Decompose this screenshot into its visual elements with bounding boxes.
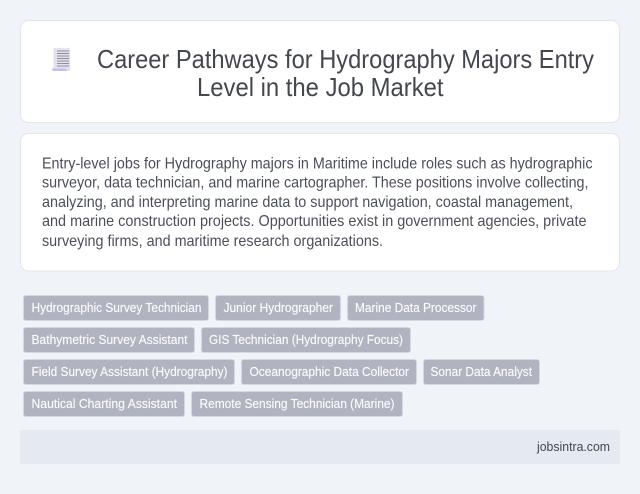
- footer source text: jobsintra.com: [536, 439, 610, 454]
- tag: Nautical Charting Assistant: [24, 392, 184, 416]
- tag: GIS Technician (Hydrography Focus): GIS Technician (Hydrography Focus): [209, 332, 403, 347]
- tag: GIS Technician (Hydrography Focus): [202, 328, 410, 352]
- panel: description card: [20, 134, 620, 271]
- title: [97, 44, 594, 102]
- tag: Junior Hydrographer: [216, 296, 340, 320]
- text block: description: surveyor, data technician, and marine cartographer. These positions involve collecting,: [42, 174, 588, 192]
- text block: description: and marine construction projects. Opportunities exist in government agencies, private: [42, 213, 586, 230]
- tag: Hydrographic Survey Technician: Hydrographic Survey Technician: [32, 300, 202, 315]
- icon: paper scroll: [52, 48, 70, 71]
- footer bar: [20, 430, 620, 464]
- tag: Oceanographic Data Collector: Oceanographic Data Collector: [250, 364, 410, 379]
- tag list: [24, 296, 540, 416]
- tag: Sonar Data Analyst: Sonar Data Analyst: [430, 364, 532, 379]
- tag: Bathymetric Survey Assistant: [24, 328, 194, 352]
- title: Level in the Job Market: [197, 72, 444, 102]
- tag: Marine Data Processor: Marine Data Processor: [355, 300, 477, 315]
- text block: description: Entry-level jobs for Hydrography majors in Maritime include roles such as hydrographic: [42, 156, 593, 172]
- tag: Sonar Data Analyst: [424, 360, 540, 384]
- tag: Field Survey Assistant (Hydrography): Field Survey Assistant (Hydrography): [32, 364, 228, 379]
- panel: title card: [20, 20, 620, 122]
- tag: Marine Data Processor: [348, 296, 484, 320]
- tag: Remote Sensing Technician (Marine): Remote Sensing Technician (Marine): [200, 396, 394, 411]
- title: Career Pathways for Hydrography Majors Entry: [97, 44, 594, 74]
- text block: description: analyzing, and interpreting marine data to support navigation, coastal management,: [42, 194, 573, 211]
- tag: Nautical Charting Assistant: Nautical Charting Assistant: [32, 396, 177, 411]
- tag: Oceanographic Data Collector: [242, 360, 416, 384]
- tag: Hydrographic Survey Technician: [24, 296, 208, 320]
- tag: Field Survey Assistant (Hydrography): [24, 360, 234, 384]
- text block: description: [42, 156, 593, 250]
- text block: description: surveying firms, and maritime research organizations.: [42, 233, 383, 250]
- tag: Remote Sensing Technician (Marine): [192, 392, 402, 416]
- tag: Junior Hydrographer: Junior Hydrographer: [224, 300, 334, 315]
- tag: Bathymetric Survey Assistant: Bathymetric Survey Assistant: [32, 332, 188, 347]
